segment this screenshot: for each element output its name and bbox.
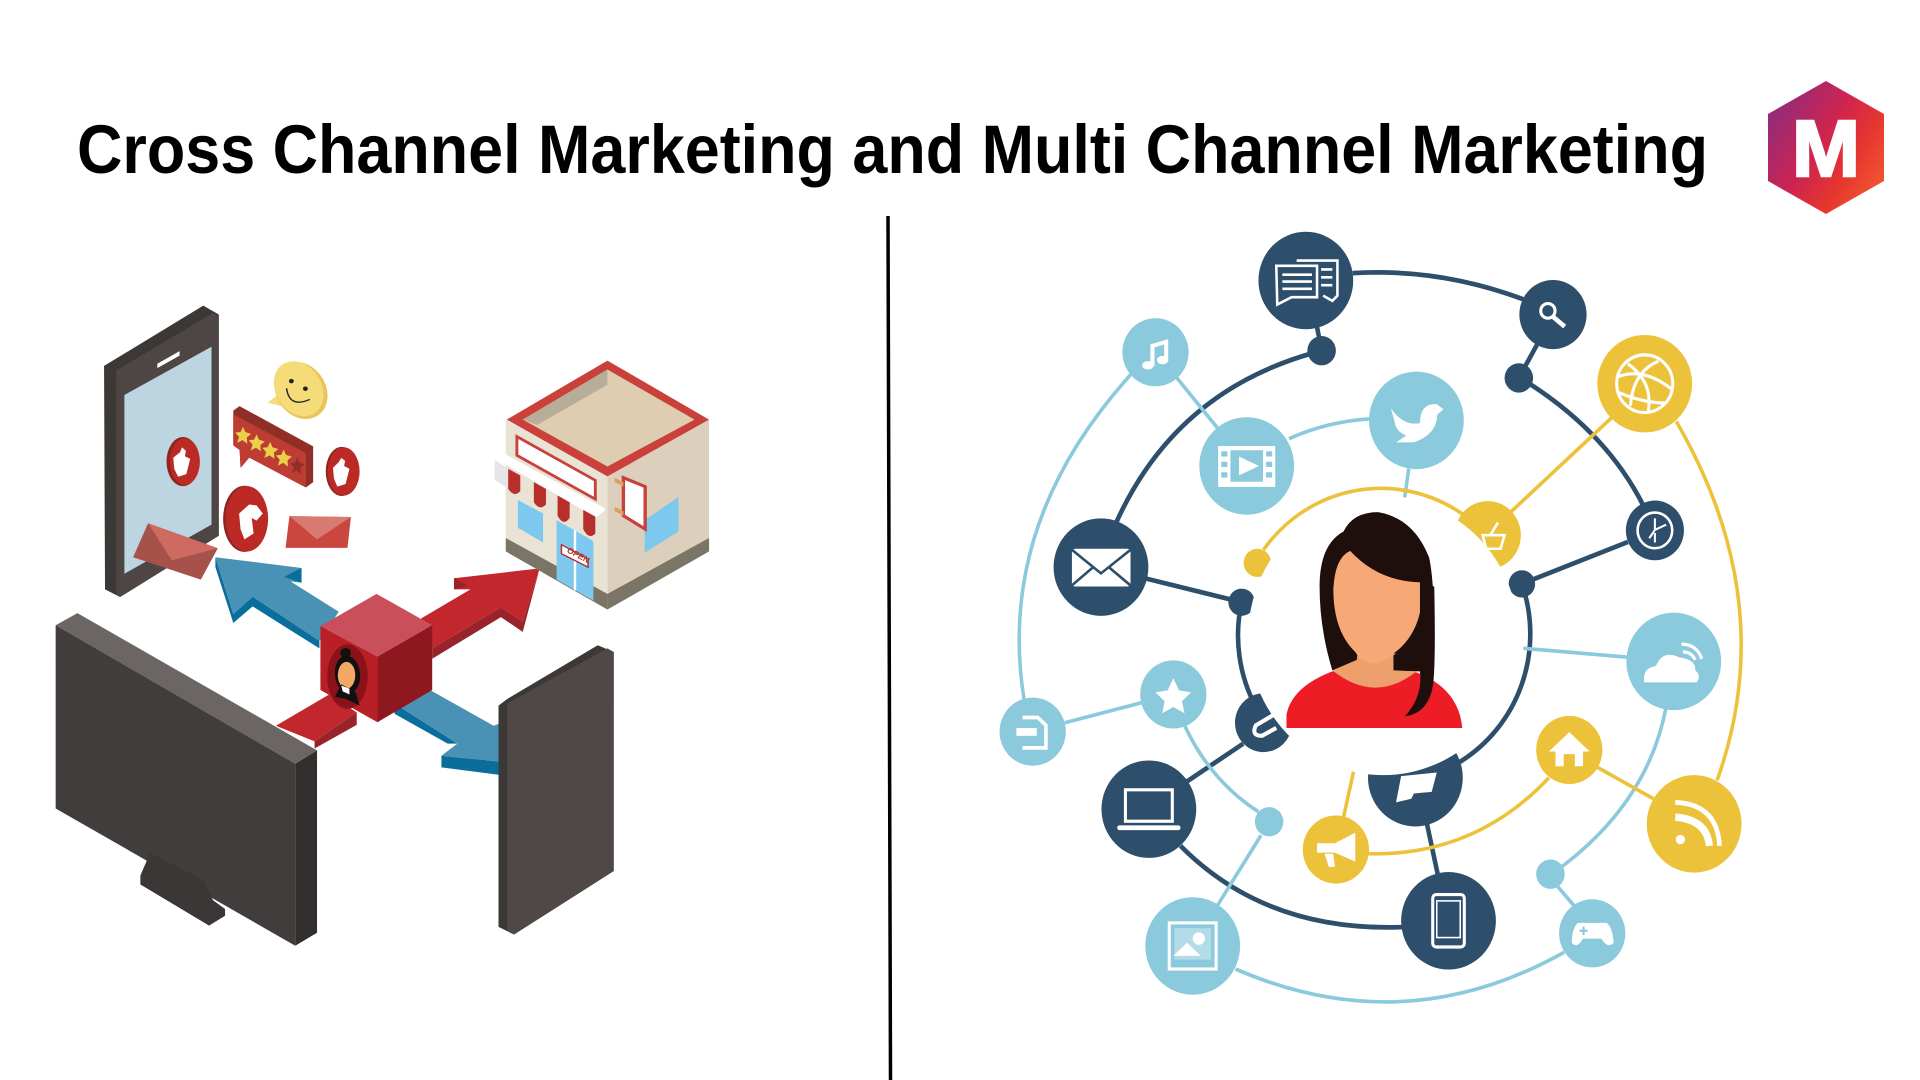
icon: laptop: [1117, 790, 1180, 830]
navy nodes: [1054, 232, 1684, 970]
arrow: red to monitor: [276, 694, 357, 749]
logo: [1768, 81, 1884, 214]
icon: search: [1541, 304, 1565, 327]
icon: central cube: [320, 594, 432, 722]
icon: envelope on phone: [133, 523, 218, 580]
light blue nodes: [1000, 318, 1721, 995]
icon: picture: [1169, 923, 1216, 969]
icon: smiley bubble: [264, 354, 337, 427]
icon: coin right: [326, 447, 360, 496]
icon: cloud: [1644, 644, 1702, 682]
light blue connector lines: [1019, 374, 1666, 1002]
icon: coin on phone: [166, 437, 200, 486]
icon: globe network: [1617, 355, 1673, 413]
icon: storefront: [495, 361, 709, 610]
icon: chat: [1276, 261, 1337, 305]
navy connector lines: [1116, 272, 1643, 927]
logo: M: [1792, 104, 1860, 193]
icon: thumbs remnant: [1396, 772, 1437, 802]
central woman avatar: [1286, 512, 1462, 728]
icon: twitter bird: [1391, 404, 1443, 442]
arrow: red to shop: [421, 568, 540, 659]
icon: coin large: [223, 486, 268, 552]
gold nodes: [1244, 335, 1742, 884]
icon: star: [1155, 678, 1191, 713]
icon: rss: [1675, 802, 1720, 846]
icon: game controller: [1572, 923, 1614, 945]
icon: link remnant: [1254, 715, 1276, 736]
icon: smartphone: [1433, 895, 1464, 947]
icon: tablet: [499, 645, 614, 935]
icon: basket remnant: [1483, 523, 1505, 549]
icon: storefront: OPEN: [565, 545, 592, 565]
icon: megaphone: [1317, 833, 1355, 867]
arrow: blue to tablet: [394, 688, 499, 775]
icon: star rating bubble: [233, 406, 313, 488]
icon: desktop monitor: [56, 613, 317, 946]
icon: house: [1549, 732, 1590, 766]
vertical divider: [888, 216, 890, 1080]
icon: envelope: [1072, 549, 1131, 586]
icon: music note: [1142, 339, 1168, 370]
icon: smartphone: [104, 306, 219, 597]
gold connector lines: [1264, 418, 1741, 854]
panel: multi channel network diagram: [1000, 232, 1742, 1002]
icon: document: [1016, 717, 1046, 748]
title: Cross Channel Marketing and Multi Channel Marketing: [77, 111, 1708, 188]
central white disc: [1248, 497, 1518, 775]
arrow: blue to phone: [215, 557, 339, 648]
icon: clock: [1638, 513, 1672, 548]
panel: cross channel isometric illustration: [56, 306, 709, 946]
icon: envelope right: [286, 516, 351, 548]
icon: video strip: [1218, 446, 1275, 487]
